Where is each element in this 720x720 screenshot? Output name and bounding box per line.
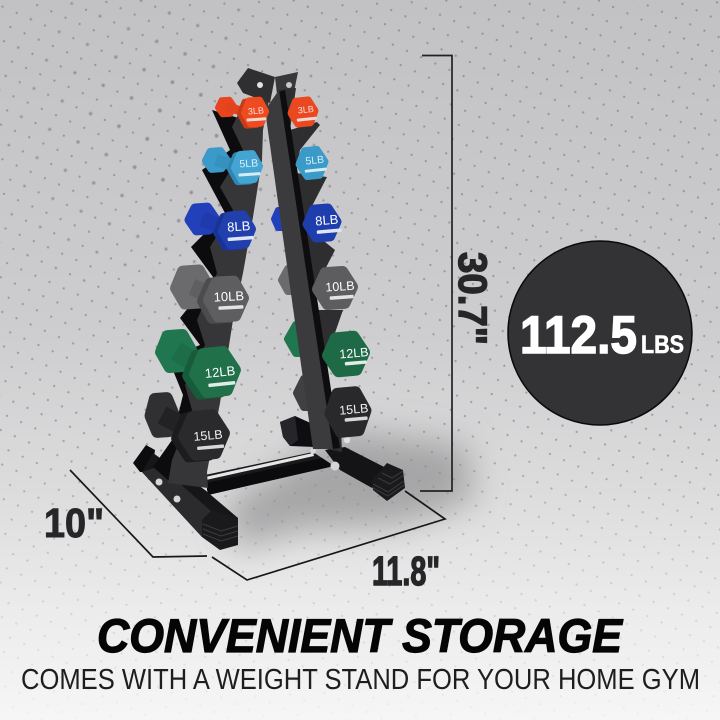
left column dumbbell handles — [162, 107, 250, 435]
dumbbell 12LB left: 12LB — [204, 363, 236, 381]
dumbbell 3LB left: 3LB — [248, 105, 264, 116]
dimension line: depth — [70, 470, 207, 557]
dumbbell 3LB right — [290, 100, 317, 124]
dumbbell 12LB right — [327, 336, 370, 372]
right column back heads — [274, 210, 327, 407]
dumbbell 12LB left — [186, 351, 237, 395]
stand base — [133, 416, 390, 537]
dumbbell 8LB left — [217, 215, 254, 246]
dumbbell 15LB right — [329, 391, 370, 432]
dumbbell 8LB left: 8LB — [227, 218, 251, 235]
dumbbell 10LB left — [202, 281, 245, 318]
dimension line: height — [420, 56, 452, 491]
width label: 11.8" — [372, 548, 440, 594]
dumbbell 10LB left: 10LB — [213, 288, 244, 305]
weight unit: LBS — [641, 331, 684, 359]
rubber foot front left — [202, 510, 238, 550]
weight stand with dumbbells — [133, 68, 405, 550]
total weight value: 112.5 — [520, 306, 637, 365]
height label: 30.7" — [450, 252, 494, 345]
left rack gray plate — [168, 95, 270, 488]
floor shadow of the stand — [225, 430, 475, 550]
right rack plate — [277, 88, 343, 452]
dumbbell 5LB left: 5LB — [239, 157, 259, 171]
dumbbell 12LB right: 12LB — [339, 345, 369, 362]
dumbbell 8LB right — [306, 207, 342, 238]
dumbbell 10LB right — [317, 271, 356, 305]
left column back heads — [149, 99, 234, 432]
top bracket — [237, 68, 298, 103]
dumbbell 10LB right: 10LB — [325, 279, 355, 295]
title: CONVENIENT STORAGE — [97, 609, 624, 662]
weight badge — [508, 241, 692, 425]
dumbbell 8LB right: 8LB — [315, 212, 339, 229]
dumbbell 5LB right: 5LB — [305, 154, 325, 168]
dumbbell 15LB left — [175, 414, 226, 457]
dumbbell 15LB right: 15LB — [339, 401, 369, 418]
depth label: 10" — [44, 500, 104, 546]
dumbbell 15LB left: 15LB — [193, 427, 223, 444]
dumbbell 3LB left — [240, 100, 267, 125]
rubber foot front right — [372, 463, 405, 501]
left rack back arms — [153, 110, 262, 480]
right rack front leg — [265, 90, 340, 449]
dumbbell 5LB left — [230, 154, 261, 182]
dumbbell 5LB right — [298, 149, 327, 177]
dimension line: width — [212, 491, 445, 580]
dumbbell 3LB right: 3LB — [297, 104, 314, 116]
